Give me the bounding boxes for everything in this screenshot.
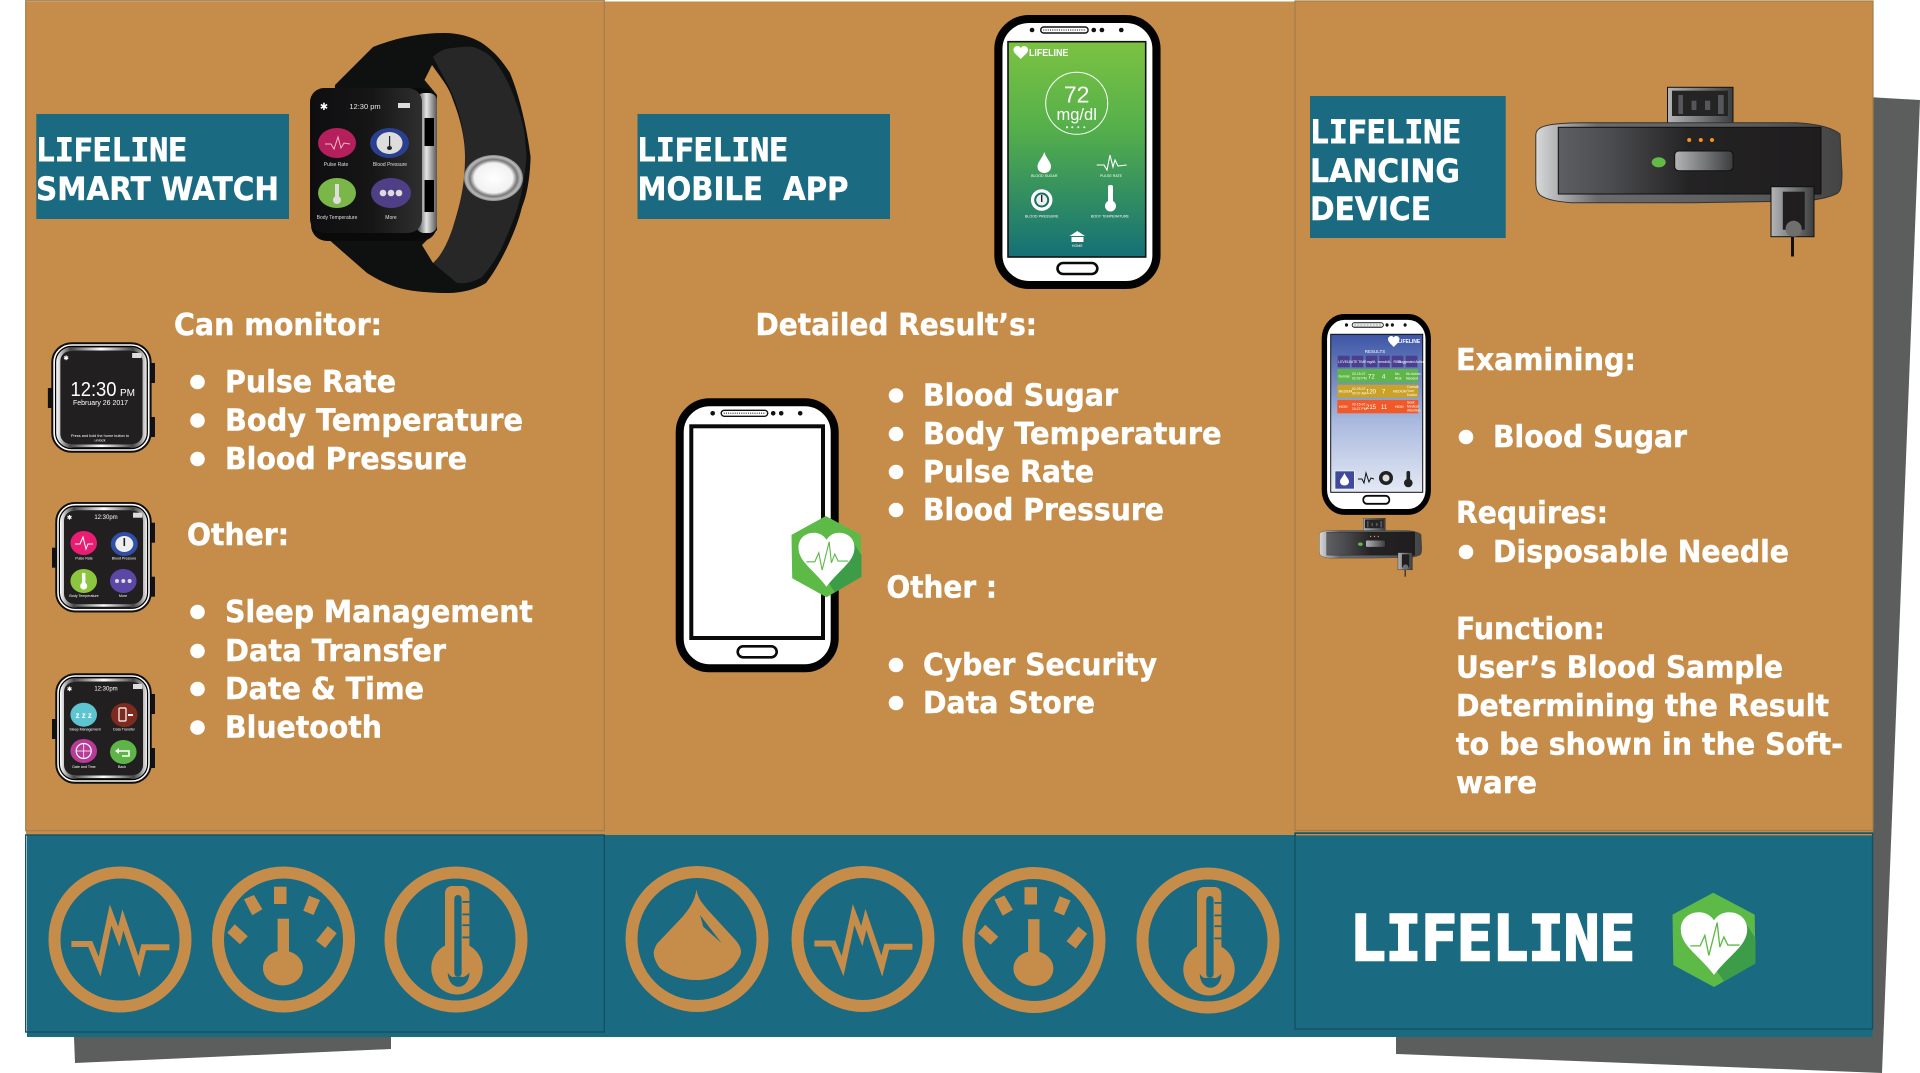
- heading: detailed results: Detailed Result’s:: [756, 308, 1037, 343]
- icon: blood drop: [632, 872, 762, 1006]
- title: lifeline smart watch: LIFELINE: [36, 133, 187, 169]
- list: detailed results: Body Temperature: [923, 417, 1222, 452]
- small watch: health menu: Body Temperature: [69, 594, 99, 598]
- small watch: tools menu: Sleep Management: [69, 728, 101, 732]
- results table: Needed: [1406, 376, 1418, 380]
- illustration: phone with results screen: [998, 19, 1156, 285]
- panel: lancing device: [1295, 1, 1873, 830]
- results table: HIGH: [1339, 405, 1348, 409]
- illustration: smart watch: [310, 33, 531, 293]
- list: detailed results: [889, 378, 1222, 528]
- icon: pulse: [54, 872, 186, 1006]
- results table: Risk: [1395, 376, 1402, 380]
- small watch: lock screen: unlock: [95, 438, 106, 442]
- text block: function: Function:: [1456, 612, 1605, 647]
- right drop shadow: [1396, 97, 1920, 1073]
- list: disposable needle: Disposable Needle: [1493, 535, 1789, 570]
- teal footer band: [27, 835, 1872, 1037]
- list: other app features: Cyber Security: [923, 648, 1157, 683]
- orange background: [26, 2, 1873, 836]
- icon: lifeline logo: [1672, 893, 1756, 987]
- icon: thermometer: [1142, 874, 1274, 1008]
- small watch: tools menu: z z z: [75, 711, 92, 720]
- icon: pulse: [798, 872, 928, 1006]
- results table: MEDIUM: [1338, 390, 1352, 394]
- list: other app features: [889, 648, 1157, 721]
- footer: brand: [1295, 833, 1873, 1029]
- title: lifeline lancing device: DEVICE: [1310, 192, 1431, 228]
- text block: function: ware: [1456, 766, 1537, 801]
- results table: DATE TIME: [1349, 360, 1367, 364]
- results table: HIGH: [1395, 405, 1404, 409]
- small watch: tools menu: Date and Time: [72, 765, 96, 769]
- results table: mmol/dL: [1378, 360, 1391, 364]
- small watch: lock screen: [48, 343, 155, 452]
- watch app icons: Blood Pressure: [373, 162, 407, 168]
- phone metric icons: HOME: [1072, 244, 1083, 248]
- list: blood sugar: Blood Sugar: [1493, 420, 1687, 455]
- results table: 02-15-07: [1352, 372, 1366, 376]
- heading: examining: Examining:: [1456, 343, 1636, 378]
- results table: 09:07 AM: [1352, 392, 1367, 396]
- results table: 72: [1368, 374, 1375, 380]
- results table: 02:02 PM: [1352, 376, 1367, 380]
- list: monitored values: Pulse Rate: [225, 365, 396, 400]
- results table: Attention: [1407, 408, 1420, 412]
- illustration: results phone with device: [1319, 317, 1428, 577]
- text block: function: Determining the Result: [1456, 689, 1829, 724]
- watch app icons: Pulse Rate: [324, 162, 348, 168]
- phone metric icons: BLOOD PRESSURE: [1025, 214, 1059, 218]
- heading: other: Other :: [886, 570, 997, 606]
- results table: No: [1395, 372, 1399, 376]
- list: other app features: Data Store: [923, 686, 1095, 721]
- small watch: health menu: More: [119, 594, 127, 598]
- results table: [1337, 336, 1425, 413]
- list: other features: Bluetooth: [225, 710, 382, 746]
- results table: 11: [1381, 405, 1388, 411]
- results table: Your: [1407, 389, 1415, 393]
- results table: 215: [1366, 405, 1377, 411]
- small watch: lock screen: 12:30: [70, 379, 116, 401]
- heading: other: Other:: [187, 518, 289, 553]
- list: monitored values: Body Temperature: [225, 404, 523, 438]
- left drop shadow: [74, 1037, 391, 1063]
- list: detailed results: Pulse Rate: [923, 455, 1094, 490]
- small watch: lock screen: February 26 2017: [73, 398, 128, 407]
- heading: can monitor: Can monitor:: [174, 308, 382, 343]
- glucose reading: mg/dl: [1057, 106, 1097, 124]
- title: lifeline lancing device: LANCING: [1310, 154, 1460, 190]
- brand name: LIFELINE: [1350, 902, 1635, 975]
- title: lifeline mobile app: MOBILE APP: [638, 172, 848, 208]
- results table: 120: [1366, 390, 1377, 396]
- footer: smart watch icons: [26, 835, 604, 1032]
- list: other features: [190, 595, 533, 746]
- panel: smart watch: [26, 1, 604, 831]
- icon: lifeline logo: [792, 516, 862, 597]
- watch status bar: ✱: [320, 102, 328, 113]
- text block: function: to be shown in the Soft-: [1456, 728, 1843, 762]
- list: detailed results: Blood Sugar: [923, 378, 1118, 414]
- list: other features: Date & Time: [225, 672, 424, 707]
- watch status bar: [320, 102, 410, 113]
- title: lifeline mobile app: LIFELINE: [637, 133, 788, 169]
- icon: thermometer: [390, 872, 522, 1006]
- phone metric icons: BLOOD SUGAR: [1031, 174, 1058, 178]
- watch app icons: [317, 128, 411, 221]
- small watch: lock screen: Press and hold the home button to: [71, 434, 129, 438]
- results table: Doctor: [1407, 393, 1418, 397]
- list: monitored values: [190, 365, 523, 477]
- results table: 02-15-07: [1352, 402, 1366, 406]
- phone metric icons: PULSE RATE: [1100, 174, 1123, 178]
- text block: function: [1456, 612, 1843, 801]
- results table: MEDIUM: [1393, 390, 1407, 394]
- phone metric icons: [1025, 152, 1130, 248]
- results table: 02-29-07: [1352, 387, 1366, 391]
- glucose reading: 72: [1064, 82, 1089, 108]
- watch app icons: More: [385, 215, 397, 221]
- small watch: health menu: 12:30pm: [94, 515, 118, 521]
- results table: mg/dL: [1367, 360, 1376, 364]
- glucose reading: [1046, 72, 1108, 134]
- footer: mobile app icons: [632, 872, 1274, 1008]
- small watch: tools menu: 12:30pm: [94, 686, 118, 692]
- results table: LIFELINE: [1398, 339, 1421, 345]
- app logo: LIFELINE: [1029, 48, 1069, 59]
- title: lifeline lancing device: [1310, 96, 1506, 238]
- small watch: lock screen: PM: [120, 388, 135, 399]
- results table: Medical: [1407, 404, 1419, 408]
- title: lifeline mobile app: [637, 114, 890, 219]
- small watch: tools menu: Back: [118, 765, 126, 769]
- icon: blood pressure gauge: [968, 873, 1100, 1007]
- results table: Normal: [1338, 374, 1350, 378]
- title: lifeline lancing device: LIFELINE: [1310, 115, 1461, 151]
- results table: LEVEL: [1338, 360, 1349, 364]
- small watch: tools menu: Data Transfer: [113, 728, 136, 732]
- results table: 7: [1382, 390, 1386, 396]
- small watch: health menu: Blood Pressure: [112, 556, 136, 560]
- illustration: lancing device: [1536, 87, 1842, 256]
- results table: Suggested Action: [1398, 360, 1425, 364]
- text block: function: User’s Blood Sample: [1456, 650, 1783, 686]
- small watch: tools menu: [52, 674, 155, 783]
- watch app icons: Body Temperature: [317, 215, 358, 221]
- results table: Consult: [1407, 385, 1419, 389]
- result phone tab icons: [1335, 471, 1413, 489]
- mini lancing device: [1319, 518, 1422, 577]
- small watch: health menu: [52, 503, 155, 612]
- watch status bar: 12:30 pm: [349, 102, 381, 111]
- phone metric icons: BODY TEMPERATURE: [1091, 214, 1130, 218]
- list: monitored values: Blood Pressure: [225, 442, 467, 477]
- app logo: [1014, 46, 1069, 59]
- results table: 10:27 PM: [1352, 407, 1367, 411]
- illustration: blank phone with logo: [680, 402, 862, 668]
- icon: blood pressure gauge: [218, 872, 349, 1006]
- small watch: health menu: Pulse Rate: [75, 556, 93, 560]
- list: detailed results: Blood Pressure: [923, 493, 1164, 528]
- heading: requires: Requires:: [1456, 496, 1608, 531]
- list: other features: Data Transfer: [225, 634, 446, 669]
- results table: Seek: [1407, 400, 1415, 404]
- results table: RISK: [1394, 360, 1402, 364]
- results table: RESULTS: [1365, 349, 1385, 354]
- list: other features: Sleep Management: [225, 595, 533, 630]
- results table: 4: [1382, 374, 1386, 380]
- title: lifeline smart watch: [36, 114, 289, 219]
- results table: No Action: [1406, 372, 1421, 376]
- title: lifeline smart watch: SMART WATCH: [36, 172, 279, 208]
- panel: mobile app: [637, 19, 1222, 721]
